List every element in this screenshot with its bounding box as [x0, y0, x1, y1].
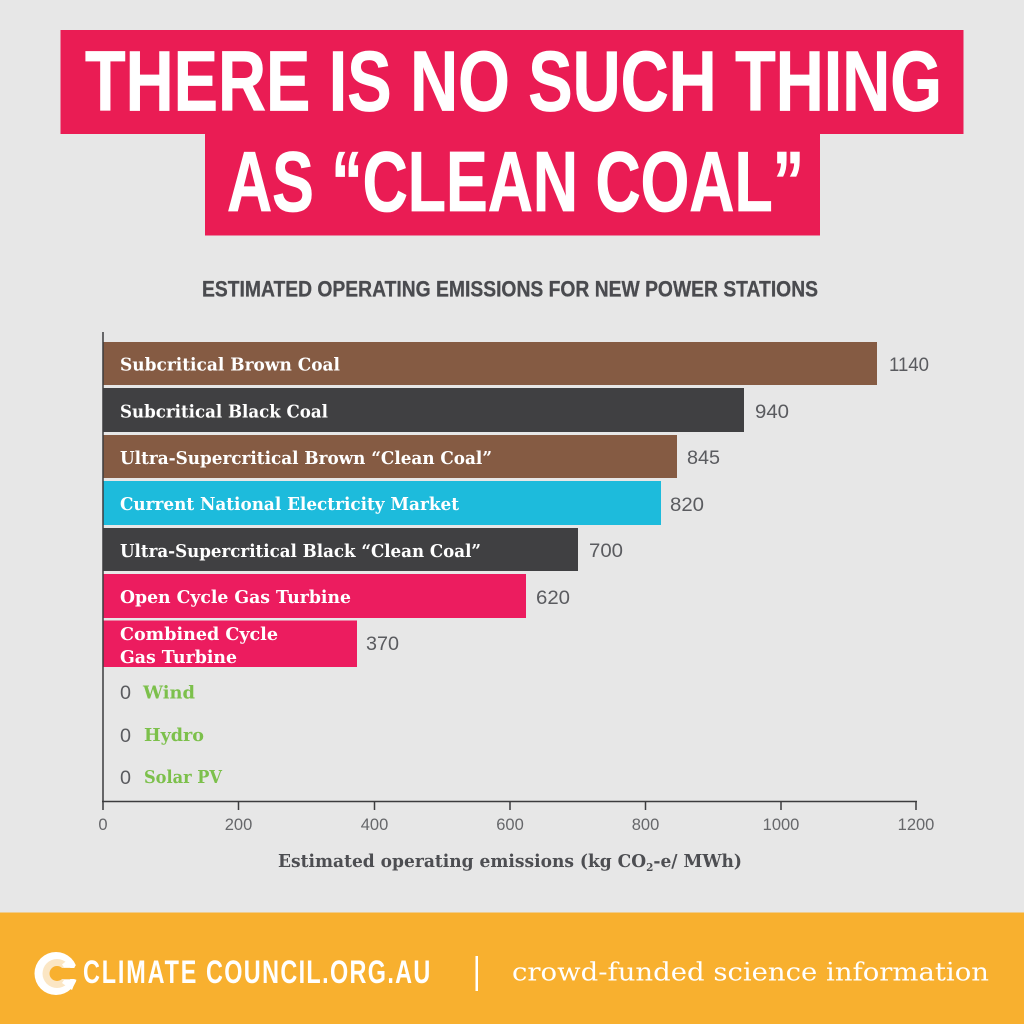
- title: [60, 30, 964, 236]
- footer band: [0, 912, 1024, 1024]
- bar: Subcritical Black Coal: [103, 388, 789, 432]
- bar: Current National Electricity Market: 820: [670, 494, 704, 516]
- bar: Subcritical Brown Coal: [103, 342, 929, 385]
- axis title: 2: [646, 861, 653, 874]
- axis title: -e/ MWh): [653, 851, 742, 872]
- label: Solar PV: [120, 767, 223, 789]
- chart axes: 1000: [763, 816, 799, 834]
- axis title: Estimated operating emissions (kg CO: [278, 851, 666, 872]
- chart axes: [98, 332, 934, 834]
- title: AS “CLEAN COAL”: [227, 135, 804, 230]
- chart axes: 1200: [898, 816, 934, 834]
- divider: [476, 956, 478, 991]
- tagline: crowd-funded science information: [512, 958, 989, 986]
- label: Solar PV: Solar PV: [144, 767, 223, 788]
- chart heading: ESTIMATED OPERATING EMISSIONS FOR NEW POWER STATIONS: [202, 276, 818, 302]
- bar: Current National Electricity Market: [103, 481, 704, 525]
- label: Hydro: Hydro: [144, 725, 204, 746]
- bar: Current National Electricity Market: Current National Electricity Market: [120, 494, 460, 515]
- icon: Climate Council logo: [34, 952, 78, 995]
- bar: Subcritical Brown Coal: 1140: [889, 354, 929, 376]
- label: Wind: Wind: [142, 682, 195, 704]
- label: Hydro: 0: [120, 725, 131, 747]
- chart axes: 800: [632, 816, 659, 834]
- bar: Combined Cycle Gas Turbine: [103, 620, 399, 668]
- bar: Ultra-Supercritical Black Clean Coal: Ultra-Supercritical Black “Clean Coal”: [120, 541, 481, 562]
- label: Wind: 0: [120, 682, 131, 704]
- chart axes: 0: [98, 816, 108, 834]
- bar: Combined Cycle Gas Turbine: 370: [366, 633, 399, 655]
- label: Solar PV: 0: [120, 767, 131, 789]
- bar: Ultra-Supercritical Black Clean Coal: 700: [589, 540, 623, 562]
- label: Wind: [120, 682, 195, 704]
- bar: Open Cycle Gas Turbine: Open Cycle Gas Turbine: [120, 587, 351, 608]
- bar: Subcritical Brown Coal: Subcritical Brown Coal: [120, 354, 340, 376]
- bar: Open Cycle Gas Turbine: 620: [536, 587, 570, 609]
- bar: Ultra-Supercritical Brown Clean Coal: Ultra-Supercritical Brown “Clean Coal”: [120, 448, 492, 469]
- bar: Open Cycle Gas Turbine: [103, 574, 570, 618]
- bar: Ultra-Supercritical Brown Clean Coal: 845: [687, 447, 720, 469]
- bar: Combined Cycle Gas Turbine: Gas Turbine: [120, 647, 237, 668]
- bar chart: [103, 342, 929, 789]
- bar: Subcritical Black Coal: Subcritical Black Coal: [120, 402, 328, 422]
- chart axes: 200: [225, 816, 252, 834]
- bar: Subcritical Black Coal: 940: [755, 401, 789, 423]
- logo wordmark: CLIMATE: [83, 953, 198, 990]
- bar: Combined Cycle Gas Turbine: Combined Cycle: [120, 624, 278, 645]
- chart axes: 600: [496, 816, 524, 834]
- bar: Ultra-Supercritical Brown Clean Coal: [103, 435, 720, 478]
- chart axes: 400: [361, 816, 388, 834]
- logo wordmark: COUNCIL.ORG.AU: [206, 953, 432, 990]
- logo wordmark: [83, 953, 432, 990]
- bar: Ultra-Supercritical Black Clean Coal: [103, 528, 623, 571]
- label: Hydro: [120, 725, 204, 747]
